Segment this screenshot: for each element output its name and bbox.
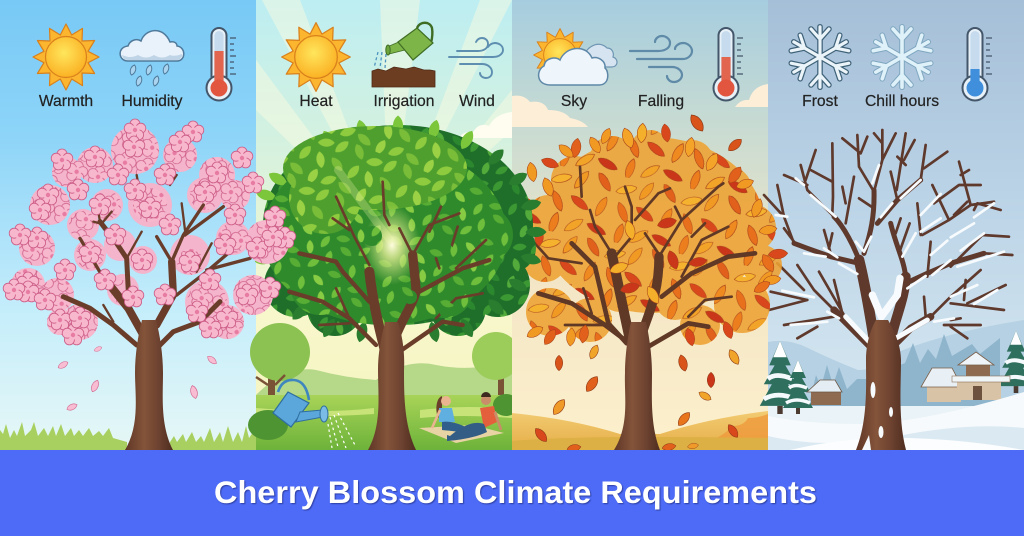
icon: thermometer autumn <box>714 28 743 100</box>
panel: autumn background <box>512 0 768 450</box>
snow on trunk <box>862 382 893 450</box>
falling petals <box>57 345 218 412</box>
falling leaves <box>532 112 744 453</box>
label: Wind: Wind <box>459 93 495 110</box>
canopy: green leaves light <box>283 126 467 234</box>
sunlight through canopy <box>338 170 420 285</box>
icon: thermometer warm <box>206 28 236 100</box>
banner <box>0 450 1024 536</box>
canopy underlay <box>523 130 782 345</box>
icon: falling wind <box>630 36 692 82</box>
trunk: autumn <box>614 322 660 450</box>
branches: spring <box>63 175 250 348</box>
label: Humidity: Humidity <box>121 93 183 110</box>
label: Sky: Sky <box>561 93 587 110</box>
tree: autumn orange <box>517 112 788 453</box>
pine tree right <box>999 331 1024 393</box>
trunk: spring <box>125 320 173 450</box>
trunk: winter <box>856 320 906 450</box>
canopy: green leaves mid <box>263 145 513 325</box>
icon: sun warmth <box>33 24 99 90</box>
icon: wind <box>449 38 503 78</box>
snow on branches <box>776 165 1004 343</box>
picnic couple on blanket <box>419 392 504 443</box>
icon: sun heat <box>282 23 350 91</box>
icon: thermometer cold <box>962 28 992 100</box>
edge leaves: green canopy <box>254 116 546 343</box>
label: Frost: Frost <box>802 93 839 110</box>
watering can: blue <box>273 380 356 448</box>
icon: rain cloud humidity <box>120 31 184 87</box>
icon: snowflake frost <box>789 27 851 87</box>
tree: spring cherry blossom <box>3 119 296 450</box>
icon: snowflake chill hours <box>871 27 933 87</box>
background tree left <box>250 323 310 413</box>
pine trees left <box>760 341 813 414</box>
label: Chill hours: Chill hours <box>865 93 939 110</box>
label: Irrigation: Irrigation <box>373 93 435 110</box>
branches: summer <box>289 182 489 352</box>
leaf clusters over branches <box>335 226 455 318</box>
canopy underlay <box>11 126 289 340</box>
label: Warmth: Warmth <box>39 93 93 110</box>
background tree right <box>472 332 520 402</box>
canopy: pink blossoms <box>11 126 289 340</box>
panel: summer background <box>248 0 520 450</box>
canopy: orange leaves <box>523 130 782 345</box>
canopy: green leaves dark outer <box>258 125 536 336</box>
tree: summer green <box>254 116 546 450</box>
house left <box>807 380 842 405</box>
individual blossoms <box>3 119 296 345</box>
icon: watering can over soil <box>372 23 435 87</box>
trunk: summer <box>368 322 416 450</box>
label: Falling: Falling <box>638 93 684 110</box>
icon: sun behind clouds <box>534 29 617 85</box>
panel: winter background <box>760 0 1024 450</box>
title: Cherry Blossom Climate Requirements <box>214 474 817 510</box>
branches: winter <box>764 130 1012 350</box>
label: Heat: Heat <box>299 93 333 110</box>
panel: spring background <box>0 0 256 450</box>
branches: autumn <box>535 167 755 347</box>
pagoda house right <box>921 352 1010 402</box>
edge leaves: autumn canopy <box>517 123 788 347</box>
tree: winter bare <box>764 130 1012 450</box>
